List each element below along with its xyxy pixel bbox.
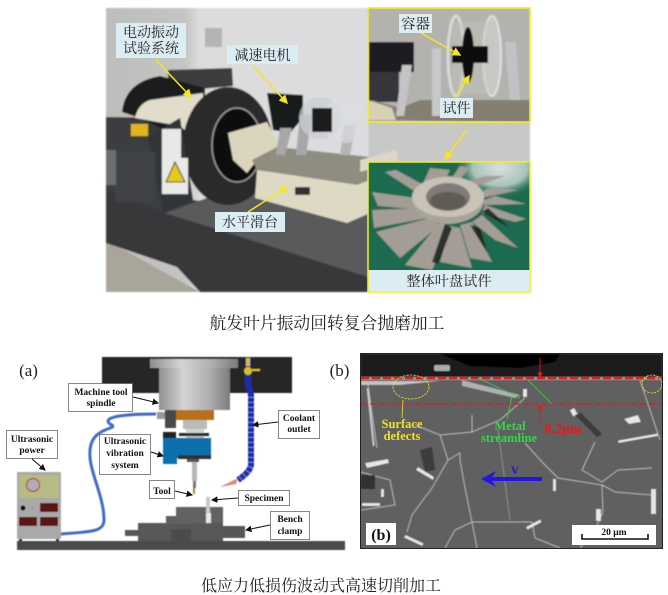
callout: ultrasonic power: [6, 430, 58, 470]
arrow: velocity direction: V: [511, 463, 520, 477]
callout: specimen: [212, 490, 290, 506]
label: container: 容器: [401, 16, 430, 33]
arrow: specimen: [456, 76, 469, 97]
panel a: ultrasonic machining schematic: [6, 357, 345, 550]
icon: tool: [192, 462, 197, 494]
arrow: to blisk specimen: [445, 130, 467, 159]
callout: ultrasonic vibration system: vibration: [106, 449, 144, 459]
panel label: b: (b): [330, 361, 349, 380]
annotation: metal streamline: [478, 378, 552, 445]
annotation: surface defects: defects: [384, 429, 421, 443]
callout: ultrasonic power: Ultrasonic: [11, 435, 53, 445]
label: panel b tag: [366, 523, 396, 545]
label: specimen: 试件: [442, 101, 470, 117]
label: panel b tag: (b): [371, 527, 391, 544]
icon: machine tool spindle: [150, 359, 238, 439]
callout: coolant outlet: outlet: [287, 425, 311, 435]
arrow: horizontal slide table: [248, 187, 287, 212]
callout: ultrasonic vibration system: [100, 434, 163, 474]
annotation: metal streamline: streamline: [481, 431, 537, 445]
label: reduction motor: 减速电机: [234, 47, 290, 64]
label: reduction motor: [227, 45, 298, 64]
background strip between right photos: [360, 122, 530, 172]
callout: specimen: Specimen: [244, 494, 284, 504]
callout: tool: Tool: [153, 487, 171, 497]
callout: tool: [150, 480, 192, 498]
callout: bench clamp: Bench: [277, 515, 303, 525]
ultrasonic cable: [60, 414, 156, 534]
callout: ultrasonic vibration system: system: [111, 461, 139, 471]
label: specimen: [440, 98, 473, 118]
label: electrodynamic vibration test system: 试验系统: [123, 41, 179, 57]
label: integral blisk specimen: 整体叶盘试件: [406, 273, 492, 290]
arrow: vibration system: [156, 60, 191, 97]
panel b: SEM micrograph: [360, 354, 662, 548]
photo: container and specimen: [368, 8, 530, 122]
label: horizontal slide table: [215, 212, 285, 232]
annotation: surface defects: Surface: [382, 417, 423, 431]
annotation: surface defect circles: [393, 375, 662, 399]
photo: electrodynamic vibration test system: [106, 8, 370, 292]
label: electrodynamic vibration test system: [116, 23, 186, 58]
callout: ultrasonic vibration system: Ultrasonic: [104, 437, 146, 447]
arrow: velocity direction: [481, 466, 542, 487]
callout: coolant outlet: Coolant: [283, 414, 316, 424]
callout: machine tool spindle: spindle: [86, 399, 116, 409]
label: integral blisk specimen: [369, 270, 529, 291]
caption: bottom figure: 低应力低损伤波动式高速切削加工: [201, 576, 441, 595]
arrow: reduction motor: [253, 66, 287, 103]
callout: machine tool spindle: [68, 384, 158, 412]
scale bar: 20 μm: [572, 525, 656, 545]
annotation: metal streamline: Metal: [494, 419, 526, 433]
callout: machine tool spindle: Machine tool: [74, 388, 128, 398]
annotation: layer thickness: 8.2μm: [544, 422, 582, 437]
callout: coolant outlet: [253, 410, 320, 438]
callout: ultrasonic power: power: [19, 446, 45, 456]
icon: bench clamp: [17, 507, 345, 550]
icon: ultrasonic power box: [17, 472, 61, 539]
photo: integral blisk specimen: [367, 161, 531, 293]
annotation: damage layer dashed lines: [361, 358, 662, 423]
frame: blisk photo: [368, 162, 530, 292]
callout: bench clamp: [246, 512, 310, 540]
panel label: a: (a): [19, 361, 38, 380]
machine head block: [102, 357, 292, 393]
frame: container photo: [368, 8, 530, 122]
icon: specimen: [206, 497, 211, 523]
icon: ultrasonic vibration system: [163, 432, 211, 464]
label: horizontal slide table: 水平滑台: [222, 214, 278, 231]
caption: top figure: 航发叶片振动回转复合抛磨加工: [210, 313, 445, 333]
scale bar: 20 μm: 20 μm: [601, 528, 627, 538]
annotation: surface defects: [382, 400, 423, 443]
icon: coolant outlet hose: [220, 358, 260, 487]
callout: bench clamp: clamp: [278, 527, 302, 537]
arrow: container: [421, 33, 460, 55]
label: electrodynamic vibration test system: 电动振动: [123, 24, 179, 41]
